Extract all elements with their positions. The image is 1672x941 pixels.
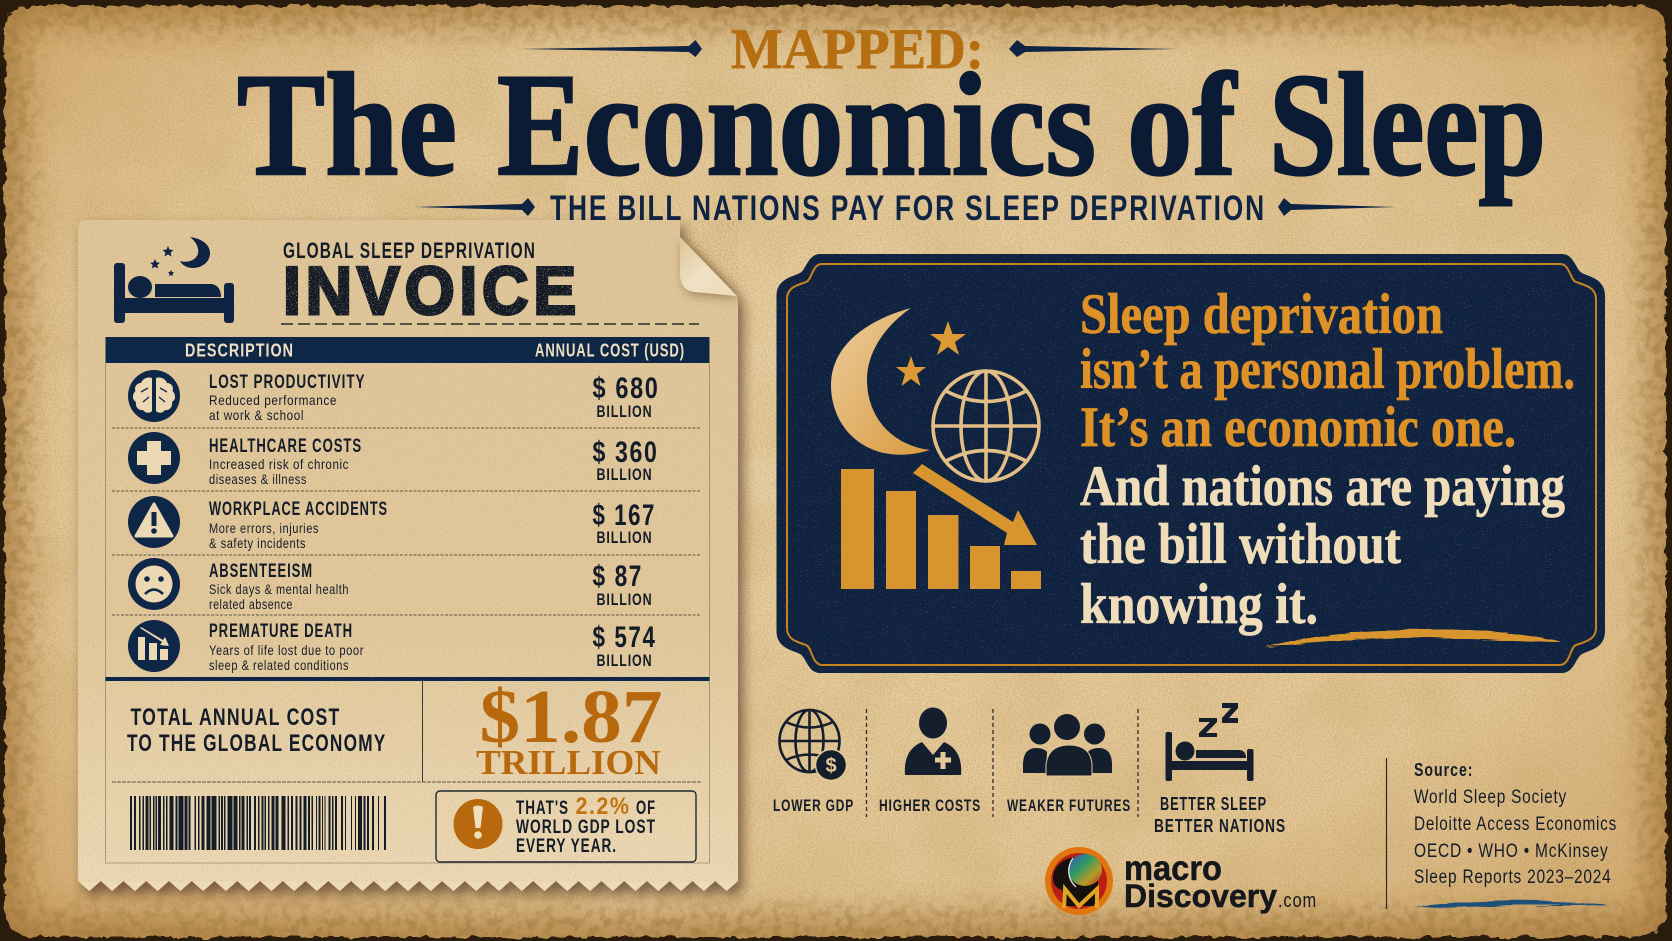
- row: lost productivity: LOST PRODUCTIVITY: [209, 371, 366, 393]
- brush underline: [1265, 630, 1561, 647]
- main title: of: [1127, 43, 1238, 206]
- row: lost productivity: [128, 370, 660, 423]
- row: workplace accidents: More errors, injuries: [209, 520, 319, 536]
- logo: macroDiscovery: .com: [1278, 890, 1317, 912]
- brush underline: source: [1414, 901, 1606, 908]
- invoice heading: INVOICE: [283, 253, 581, 329]
- source list: Sleep Reports 2023–2024: [1414, 867, 1612, 888]
- source list: [1414, 760, 1617, 888]
- receipt paper with zigzag edge: [78, 220, 738, 891]
- row: workplace accidents: BILLION: [596, 528, 652, 547]
- row: absenteeism: $ 87: [592, 560, 643, 593]
- icon: warning triangle: [128, 496, 180, 548]
- icon: medical cross: [128, 432, 180, 484]
- logo: macroDiscovery: [1045, 847, 1317, 915]
- logo: macroDiscovery: macro: [1124, 849, 1222, 888]
- subtitle: THE BILL NATIONS PAY FOR SLEEP DEPRIVATION: [550, 189, 1266, 228]
- row: healthcare costs: Increased risk of chronic: [209, 456, 349, 472]
- main title: Economics: [497, 43, 1096, 206]
- page curl: [680, 237, 737, 296]
- row: premature death: PREMATURE DEATH: [209, 620, 353, 642]
- icon: sad face: [128, 558, 180, 610]
- item: lower GDP: LOWER GDP: [773, 796, 854, 815]
- source list: Deloitte Access Economics: [1414, 814, 1617, 835]
- icon: globe with dollar: $: [825, 755, 837, 777]
- source list: OECD • WHO • McKinsey: [1414, 841, 1608, 862]
- logo mark: [1045, 847, 1113, 915]
- logo: macroDiscovery: Discovery: [1124, 878, 1277, 914]
- statement text: Sleep deprivation: [1080, 283, 1443, 346]
- row: premature death: Years of life lost due to poor: [209, 642, 364, 658]
- total figure: TRILLION: [476, 743, 661, 782]
- row: premature death: $ 574: [592, 621, 656, 654]
- barcode: [130, 796, 386, 850]
- callout: share of world GDP: [436, 791, 696, 862]
- panel: invoice receipt: [78, 220, 738, 891]
- callout: share of world GDP: WORLD GDP LOST: [516, 817, 656, 838]
- statement text: And nations are paying: [1080, 455, 1565, 518]
- icon: brain: [128, 370, 180, 422]
- kicker: MAPPED: [521, 18, 1178, 81]
- item: weaker futures: WEAKER FUTURES: [1007, 796, 1131, 815]
- main title: The: [237, 43, 457, 206]
- table header bar: [106, 337, 710, 363]
- icon: doctor: [905, 708, 961, 775]
- panel: navy statement card: [776, 254, 1606, 674]
- row: lost productivity: $ 680: [592, 372, 660, 405]
- source list: Source:: [1414, 760, 1474, 780]
- icon: bed with moon and stars: [114, 237, 234, 323]
- row: premature death: BILLION: [596, 651, 652, 670]
- item: better sleep better nations: [1154, 703, 1286, 836]
- icon: three people: [1023, 714, 1112, 776]
- item: lower GDP: [773, 710, 854, 815]
- item: higher costs: [879, 708, 981, 815]
- callout: share of world GDP: EVERY YEAR.: [516, 836, 617, 857]
- total figure: $1.87: [480, 675, 662, 759]
- kicker: MAPPED: MAPPED:: [731, 18, 984, 81]
- row: healthcare costs: BILLION: [596, 465, 652, 484]
- icon: bed with Zs: [1166, 703, 1254, 781]
- row: absenteeism: ABSENTEEISM: [209, 560, 313, 582]
- item: weaker futures: [1007, 714, 1131, 815]
- callout: share of world GDP: 2.2%: [576, 793, 630, 820]
- texture on receipt: [78, 220, 738, 882]
- row: absenteeism: BILLION: [596, 590, 652, 609]
- statement text: [1080, 283, 1575, 636]
- icon: falling bars: [128, 620, 180, 672]
- main title: [237, 43, 1546, 206]
- icon: moon, stars and globe over falling bars: [831, 308, 1041, 589]
- row: workplace accidents: WORKPLACE ACCIDENTS: [209, 498, 388, 520]
- table header bar: DESCRIPTION: [185, 340, 294, 360]
- row: workplace accidents: $ 167: [592, 499, 656, 532]
- row: premature death: [128, 620, 656, 673]
- row: workplace accidents: [128, 496, 656, 551]
- row: lost productivity: BILLION: [596, 402, 652, 421]
- total label: TOTAL ANNUAL COST: [130, 704, 340, 731]
- source list: World Sleep Society: [1414, 787, 1567, 808]
- statement text: knowing it.: [1080, 573, 1318, 636]
- row: workplace accidents: & safety incidents: [209, 535, 306, 551]
- item: better sleep better nations: BETTER SLEEP: [1160, 794, 1267, 814]
- callout: share of world GDP: OF: [636, 798, 656, 819]
- row: absenteeism: Sick days & mental health: [209, 581, 349, 597]
- total label: [127, 704, 386, 757]
- item: better sleep better nations: BETTER NATIONS: [1154, 816, 1286, 836]
- callout: share of world GDP: THAT'S: [516, 798, 569, 819]
- row: lost productivity: Reduced performance: [209, 392, 337, 408]
- item: higher costs: HIGHER COSTS: [879, 796, 981, 815]
- row: premature death: sleep & related conditions: [209, 657, 349, 673]
- icon: exclamation: [454, 799, 502, 849]
- bar chart: [841, 469, 1041, 589]
- arrow: [913, 464, 1037, 545]
- row: absenteeism: [128, 558, 652, 612]
- row: healthcare costs: HEALTHCARE COSTS: [209, 435, 362, 457]
- row: healthcare costs: $ 360: [592, 436, 658, 469]
- row: absenteeism: related absence: [209, 596, 293, 612]
- table header bar: ANNUAL COST (USD): [535, 340, 685, 360]
- statement text: It’s an economic one.: [1080, 396, 1516, 459]
- total label: TO THE GLOBAL ECONOMY: [127, 730, 386, 757]
- statement text: isn’t a personal problem.: [1080, 338, 1575, 401]
- invoice heading: GLOBAL SLEEP DEPRIVATION: [283, 238, 536, 263]
- main title: Sleep: [1269, 43, 1546, 206]
- statement text: the bill without: [1080, 513, 1401, 576]
- row: healthcare costs: diseases & illness: [209, 471, 307, 487]
- globe: [933, 371, 1039, 481]
- row: lost productivity: at work & school: [209, 407, 304, 423]
- row: healthcare costs: [128, 432, 658, 487]
